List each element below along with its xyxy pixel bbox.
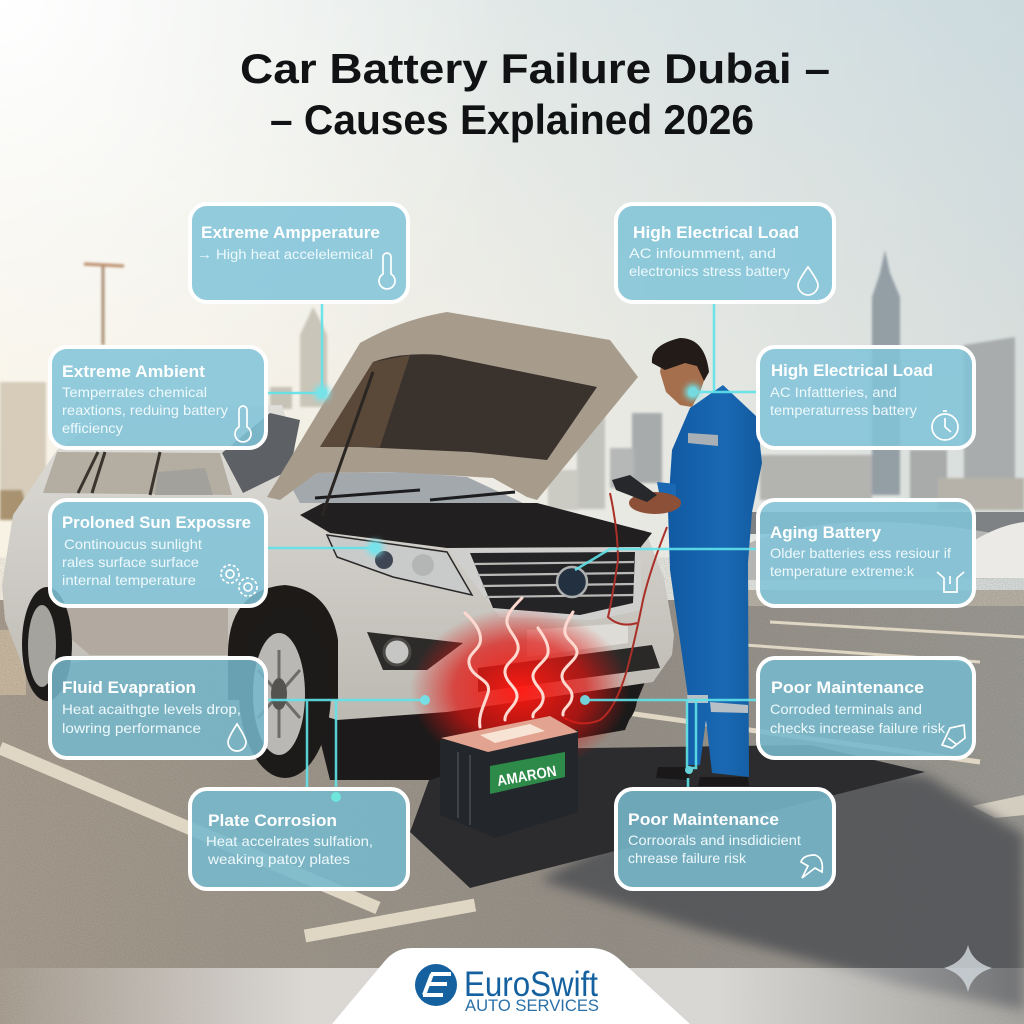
card: poor maintenance right: checks increase failure risk (770, 720, 946, 736)
card: aging battery: temperature extreme:k (770, 563, 915, 579)
icon: battery (937, 572, 964, 592)
wipers (315, 490, 515, 500)
red heat glow (410, 608, 630, 772)
card: prolonged sun exposure: internal temperature (62, 572, 196, 588)
sky background (0, 0, 1024, 640)
card: poor maintenance bottom: Poor Maintenance (628, 810, 779, 829)
hair (652, 338, 709, 381)
footer band (0, 968, 1024, 1024)
card: poor maintenance bottom (616, 789, 834, 889)
icon: gears (221, 565, 257, 596)
icon: flame (801, 855, 822, 878)
card: plate corrosion: Plate Corrosion (208, 811, 337, 830)
card: poor maintenance right (758, 658, 974, 758)
mechanic (563, 338, 762, 786)
card: extreme amperature (190, 204, 408, 302)
sleeve (657, 482, 676, 500)
card: prolonged sun exposure: Proloned Sun Expossre (62, 513, 251, 532)
card: prolonged sun exposure: rales surface surface (62, 554, 199, 570)
card: fluid evaporation: Fluid Evapration (62, 678, 196, 697)
right front tire (569, 664, 637, 732)
card: plate corrosion: weaking patoy plates (207, 851, 350, 867)
icon: droplet (228, 724, 246, 751)
icon: thermometer (379, 253, 395, 289)
mirror (155, 468, 213, 495)
card: plate corrosion: Heat accelrates sulfation, (206, 833, 373, 849)
hands (629, 492, 681, 514)
hood strut (322, 372, 373, 516)
lower intake (478, 645, 660, 692)
card: high electrical load top: electronics stress battery (629, 263, 790, 279)
parked cars background (745, 512, 1024, 580)
card: extreme amperature: → High heat accelelemical (197, 246, 373, 262)
card: extreme ambient: efficiency (62, 420, 123, 436)
engine bay (300, 503, 652, 548)
reflective stripes (687, 695, 748, 713)
card: high electrical load middle (758, 347, 974, 448)
card: prolonged sun exposure (50, 500, 266, 606)
head (660, 352, 706, 407)
card: plate corrosion (190, 789, 408, 889)
card: high electrical load top: High Electrical Load (633, 223, 799, 242)
icon: clock (932, 411, 958, 440)
connector lines (268, 304, 756, 787)
card: extreme ambient: Temperrates chemical (62, 384, 207, 400)
number plate (527, 623, 628, 657)
side windows (43, 452, 232, 495)
brand name: AUTO SERVICES (465, 996, 599, 1015)
card: poor maintenance bottom: chrease failure risk (628, 850, 747, 866)
grille (447, 547, 642, 620)
fog lamp (367, 632, 463, 670)
card: poor maintenance right: Poor Maintenance (771, 678, 924, 697)
coverall (668, 385, 762, 777)
under-car shadow (310, 670, 650, 780)
card: high electrical load middle: High Electrical Load (771, 361, 933, 380)
footer logo panel (332, 948, 690, 1024)
card: extreme ambient (50, 347, 266, 448)
card: poor maintenance bottom: Corroorals and insdidicient (628, 832, 801, 848)
car (2, 312, 674, 778)
logo mark (415, 964, 457, 1006)
card: high electrical load middle: AC Infattteries, and (770, 384, 897, 400)
icon: droplet (798, 267, 818, 295)
card: fluid evaporation (50, 658, 266, 758)
card: fluid evaporation: Heat acaithgte levels drop, (62, 701, 241, 717)
card: aging battery: Older batteries ess resiour if (770, 545, 951, 561)
card: high electrical load middle: temperaturress battery (770, 402, 917, 418)
title: – Causes Explained 2026 (270, 96, 754, 143)
rubber mat (410, 745, 925, 888)
title: Car Battery Failure Dubai – (240, 45, 830, 92)
card: aging battery (758, 500, 974, 606)
card: fluid evaporation: lowring performance (62, 720, 201, 736)
open hood (267, 312, 638, 500)
car body (2, 405, 674, 720)
card: extreme amperature: Extreme Ampperature (201, 223, 380, 242)
headlight (327, 535, 472, 595)
icon: thermometer (235, 406, 251, 442)
card: aging battery: Aging Battery (770, 523, 882, 542)
windshield (222, 413, 300, 493)
chest stripe (688, 433, 718, 446)
city skyline (0, 250, 1024, 520)
asphalt ground (0, 590, 1024, 1024)
card: high electrical load top (616, 204, 834, 302)
title (240, 45, 830, 143)
shoes (656, 767, 749, 786)
front windshield under hood (293, 472, 523, 503)
door panel (63, 608, 228, 655)
wheel arch (228, 585, 338, 700)
card: extreme ambient: Extreme Ambient (62, 362, 205, 381)
brand name: EuroSwift (464, 965, 598, 1004)
battery (440, 716, 578, 838)
card: extreme ambient: reaxtions, reduing battery (62, 402, 228, 418)
sparkle (944, 945, 992, 992)
front wheel (239, 606, 331, 778)
rear wheel (22, 587, 72, 701)
card: poor maintenance right: Corroded terminals and (770, 701, 922, 717)
icon: wrench (942, 725, 965, 748)
heat waves (465, 598, 577, 727)
card: prolonged sun exposure: Continoucus sunlight (64, 536, 202, 552)
multimeter (612, 475, 657, 502)
card: high electrical load top: AC infoumment, and (629, 245, 776, 261)
red test leads (563, 493, 667, 723)
battery label: AMARON (496, 763, 558, 790)
